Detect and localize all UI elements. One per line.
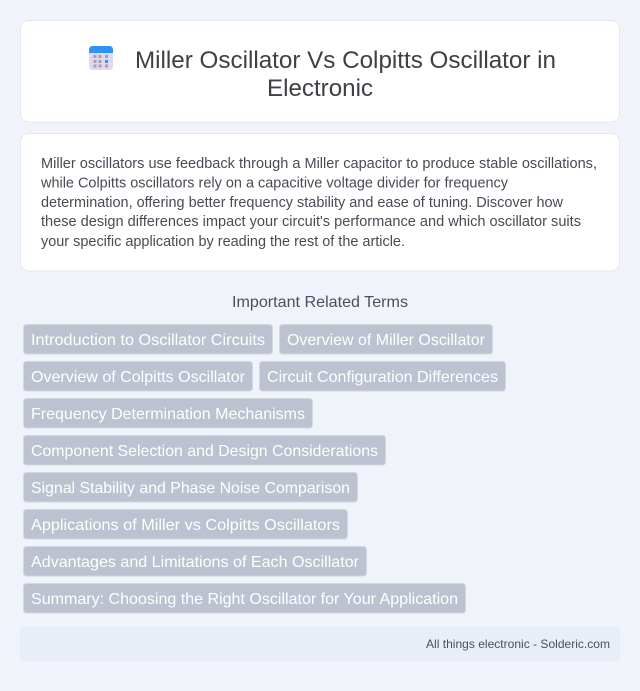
footer (20, 627, 620, 661)
text block: summary: your specific application by reading the rest of the article. (41, 234, 405, 250)
tag: signal stability: Signal Stability and Phase Noise Comparison (31, 480, 350, 497)
text block: summary: determination, offering better frequency stability and ease of tuning. Discover how (41, 195, 564, 211)
tag: summary (24, 584, 466, 613)
title: Electronic (267, 75, 373, 102)
text block: summary: these design differences impact your circuit's performance and which oscillator suits (41, 214, 581, 230)
tag: circuit configuration (260, 362, 506, 391)
title: Miller Oscillator Vs Colpitts Oscillator in (135, 47, 556, 74)
text block: summary: while Colpitts oscillators rely on a capacitive voltage divider for frequency (40, 176, 509, 192)
title (135, 47, 556, 102)
text block: summary: Miller oscillators use feedback through a Miller capacitor to produce stable oscillations, (41, 156, 597, 172)
tag: overview of colpitts (24, 362, 252, 391)
tag: advantages (24, 546, 366, 576)
heading: important related terms: Important Related Terms (232, 294, 408, 311)
panel: title header (20, 20, 620, 122)
tag: overview of colpitts: Overview of Colpitts Oscillator (31, 369, 246, 386)
tag: frequency determination: Frequency Determination Mechanisms (31, 406, 305, 423)
tag: advantages: Advantages and Limitations of Each Oscillator (31, 554, 360, 571)
tag: applications (24, 510, 348, 539)
tag: introduction: Introduction to Oscillator Circuits (31, 332, 265, 349)
tag: circuit configuration: Circuit Configuration Differences (267, 369, 498, 386)
footer: All things electronic - Solderic.com (426, 637, 610, 651)
tag: overview of miller (280, 324, 492, 354)
tag: summary: Summary: Choosing the Right Oscillator for Your Application (31, 591, 458, 608)
icon: calendar (89, 46, 113, 70)
tag: overview of miller: Overview of Miller Oscillator (287, 332, 486, 349)
tag list: related terms (24, 324, 506, 613)
tag: component selection: Component Selection and Design Considerations (31, 443, 378, 460)
tag: signal stability (24, 472, 358, 502)
text block: summary (40, 156, 597, 250)
tag: component selection (24, 436, 386, 465)
tag: frequency determination (24, 398, 312, 428)
panel: summary text (20, 134, 620, 271)
tag: applications: Applications of Miller vs Colpitts Oscillators (31, 517, 340, 534)
tag: introduction (24, 324, 272, 354)
